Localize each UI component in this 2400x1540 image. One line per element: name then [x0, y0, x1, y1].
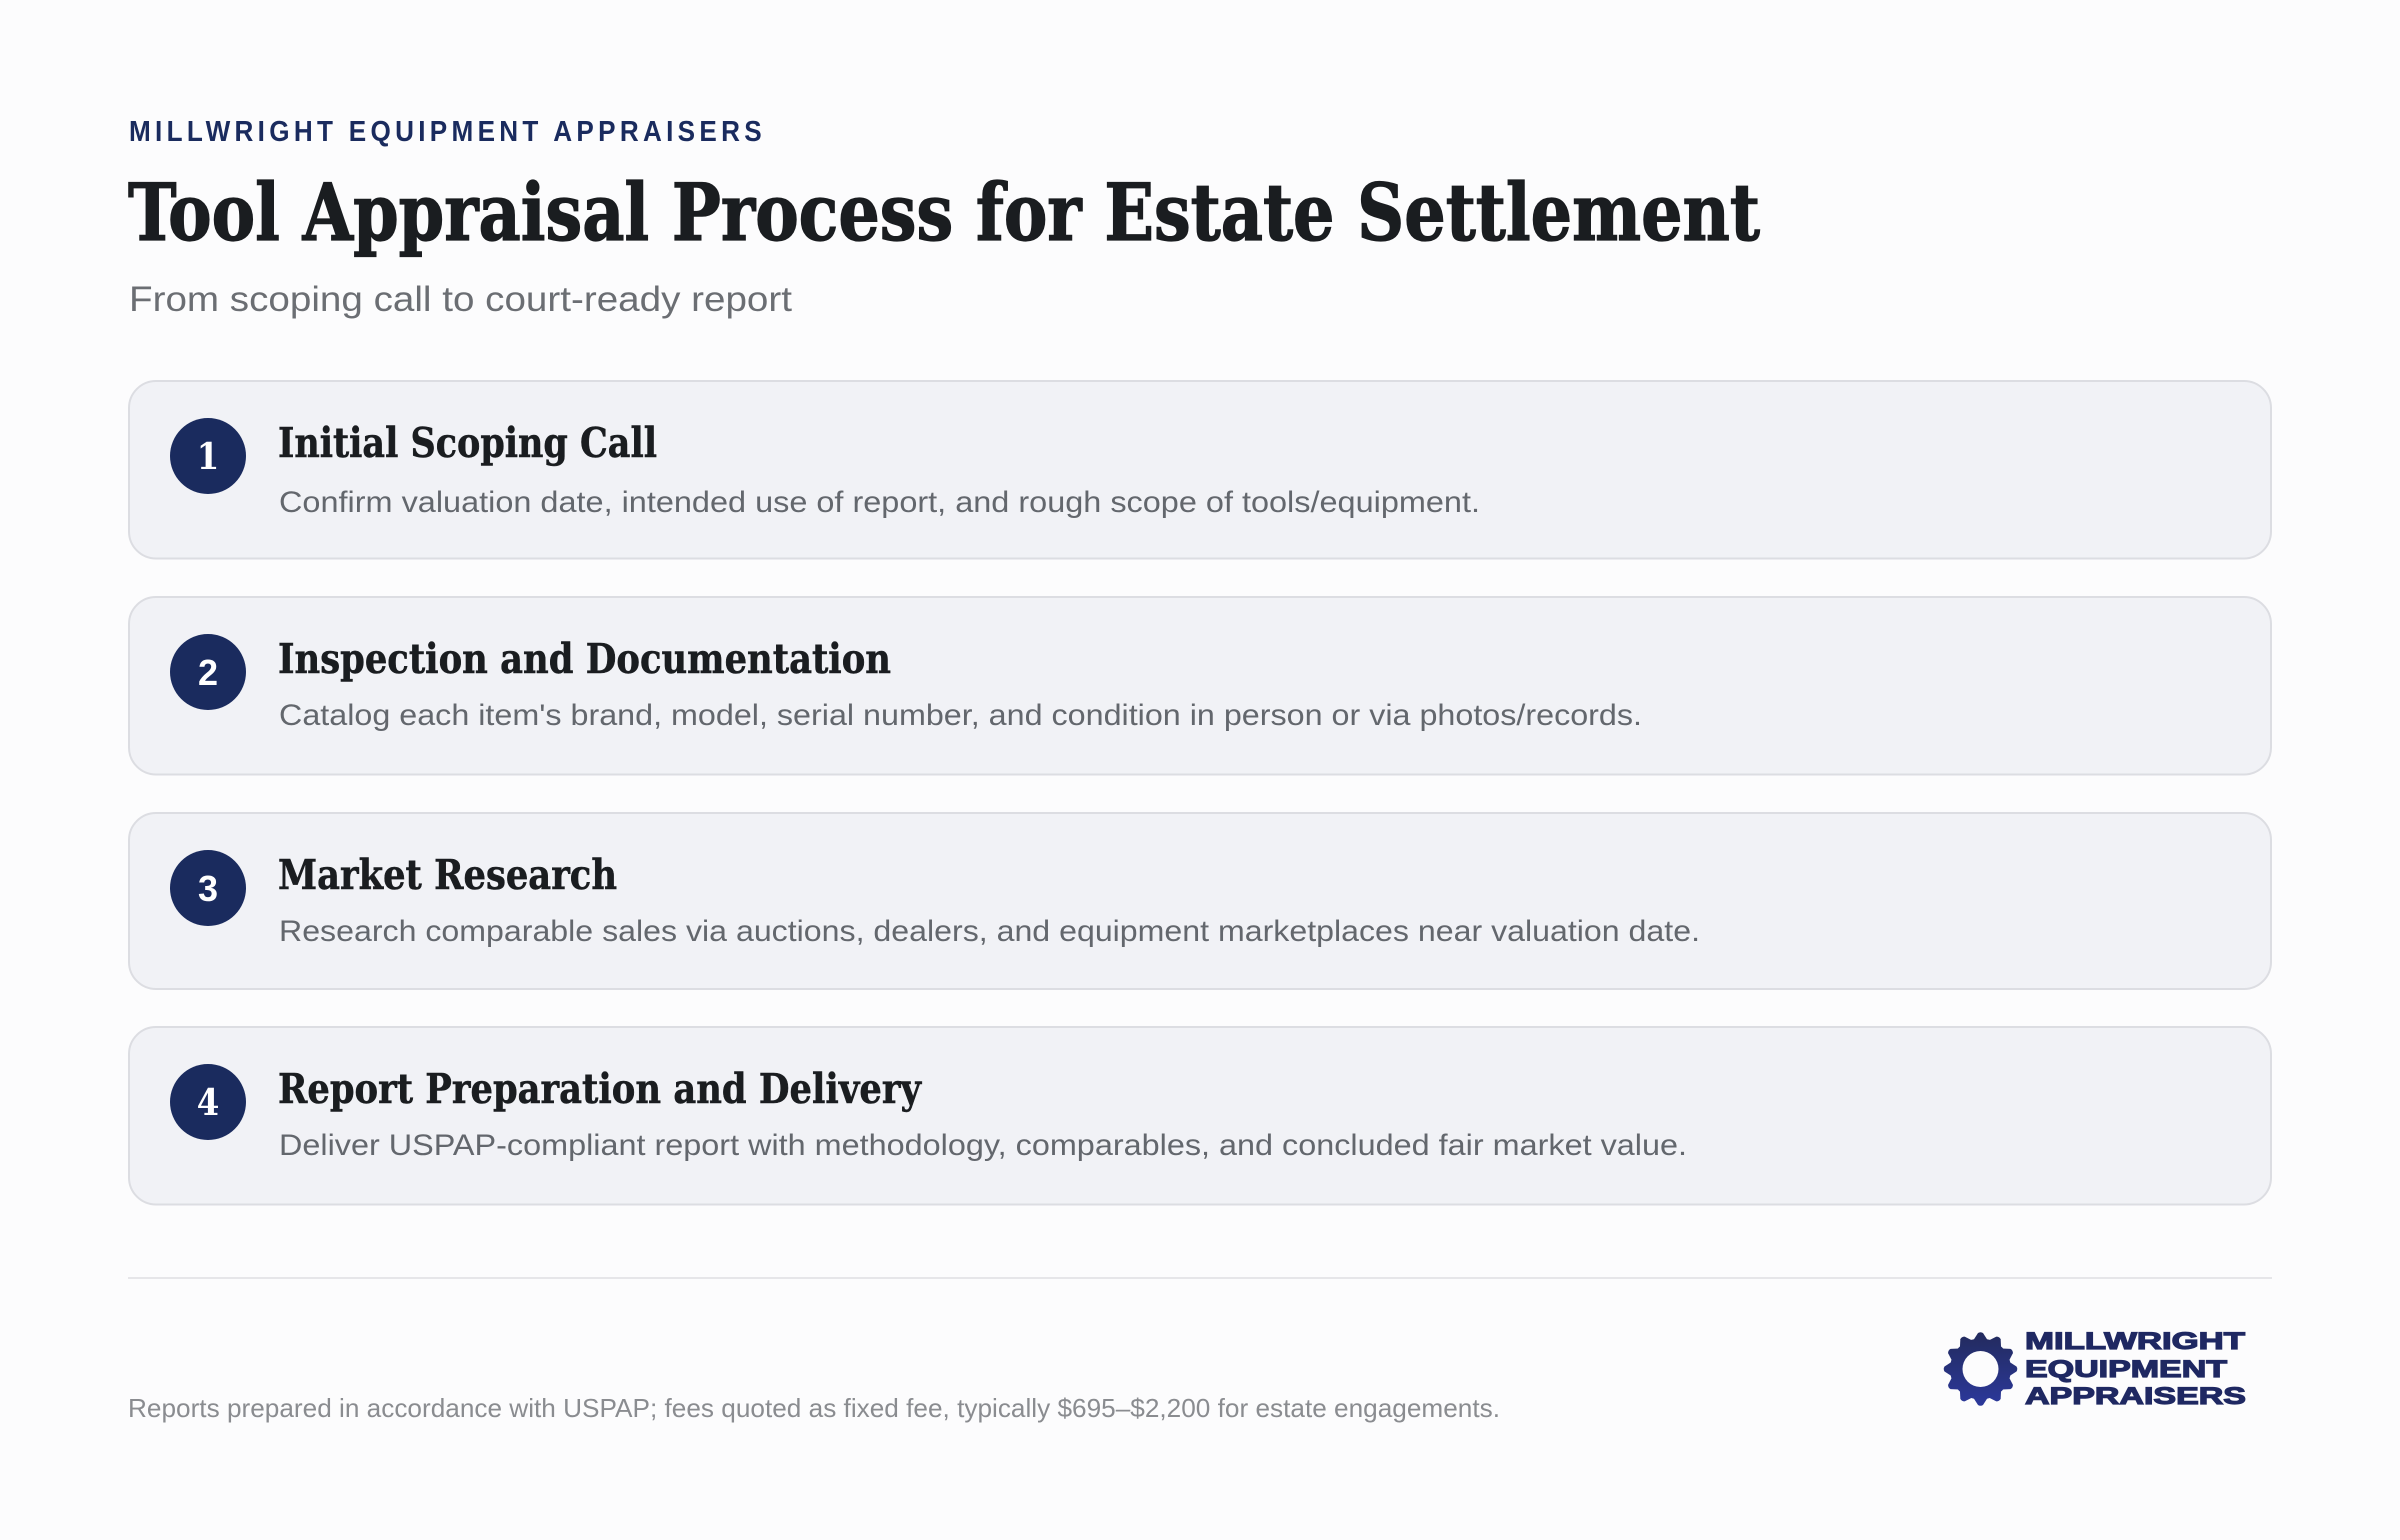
step 4 heading: Report Preparation and Delivery [278, 1065, 922, 1113]
logo wordmark: APPRAISERS [2025, 1383, 2246, 1410]
panel: step 1 [129, 381, 2271, 558]
step 1 description: Confirm valuation date, intended use of report, and rough scope of tools/equipment. [279, 486, 1480, 519]
panel: step 3 [129, 813, 2271, 989]
step 1 number badge: 1 [197, 436, 219, 478]
icon: gear [1944, 1332, 2018, 1406]
logo wordmark: EQUIPMENT [2025, 1356, 2227, 1383]
step 3 number badge: 3 [198, 868, 218, 909]
subtitle: From scoping call to court-ready report [129, 280, 792, 319]
panel: step 4 [129, 1027, 2271, 1204]
footer note: Reports prepared in accordance with USPAP; fees quoted as fixed fee, typically $695–$2,200 for estate engagements. [128, 1393, 1500, 1423]
step 4 number badge [170, 1064, 246, 1140]
eyebrow: company name: MILLWRIGHT EQUIPMENT APPRAISERS [129, 115, 762, 147]
title: Tool Appraisal Process for Estate Settlement [128, 166, 1760, 259]
step 3 heading: Market Research [278, 851, 617, 899]
step 3 description: Research comparable sales via auctions, dealers, and equipment marketplaces near valuation date. [279, 915, 1700, 948]
step 2 number badge [170, 634, 246, 710]
logo: Millwright Equipment Appraisers [1944, 1332, 2246, 1406]
logo wordmark: MILLWRIGHT [2025, 1328, 2245, 1355]
step 1 heading: Initial Scoping Call [278, 419, 657, 467]
logo wordmark [2025, 1328, 2246, 1410]
step 2 number badge: 2 [198, 652, 218, 693]
step 1 number badge [170, 418, 246, 494]
step 2 heading: Inspection and Documentation [278, 635, 891, 683]
step 3 number badge [170, 850, 246, 926]
step 4 description: Deliver USPAP-compliant report with methodology, comparables, and concluded fair market value. [279, 1129, 1687, 1162]
step 4 number badge: 4 [197, 1082, 219, 1124]
step 2 description: Catalog each item's brand, model, serial number, and condition in person or via photos/records. [279, 699, 1642, 732]
panel: step 2 [129, 597, 2271, 774]
